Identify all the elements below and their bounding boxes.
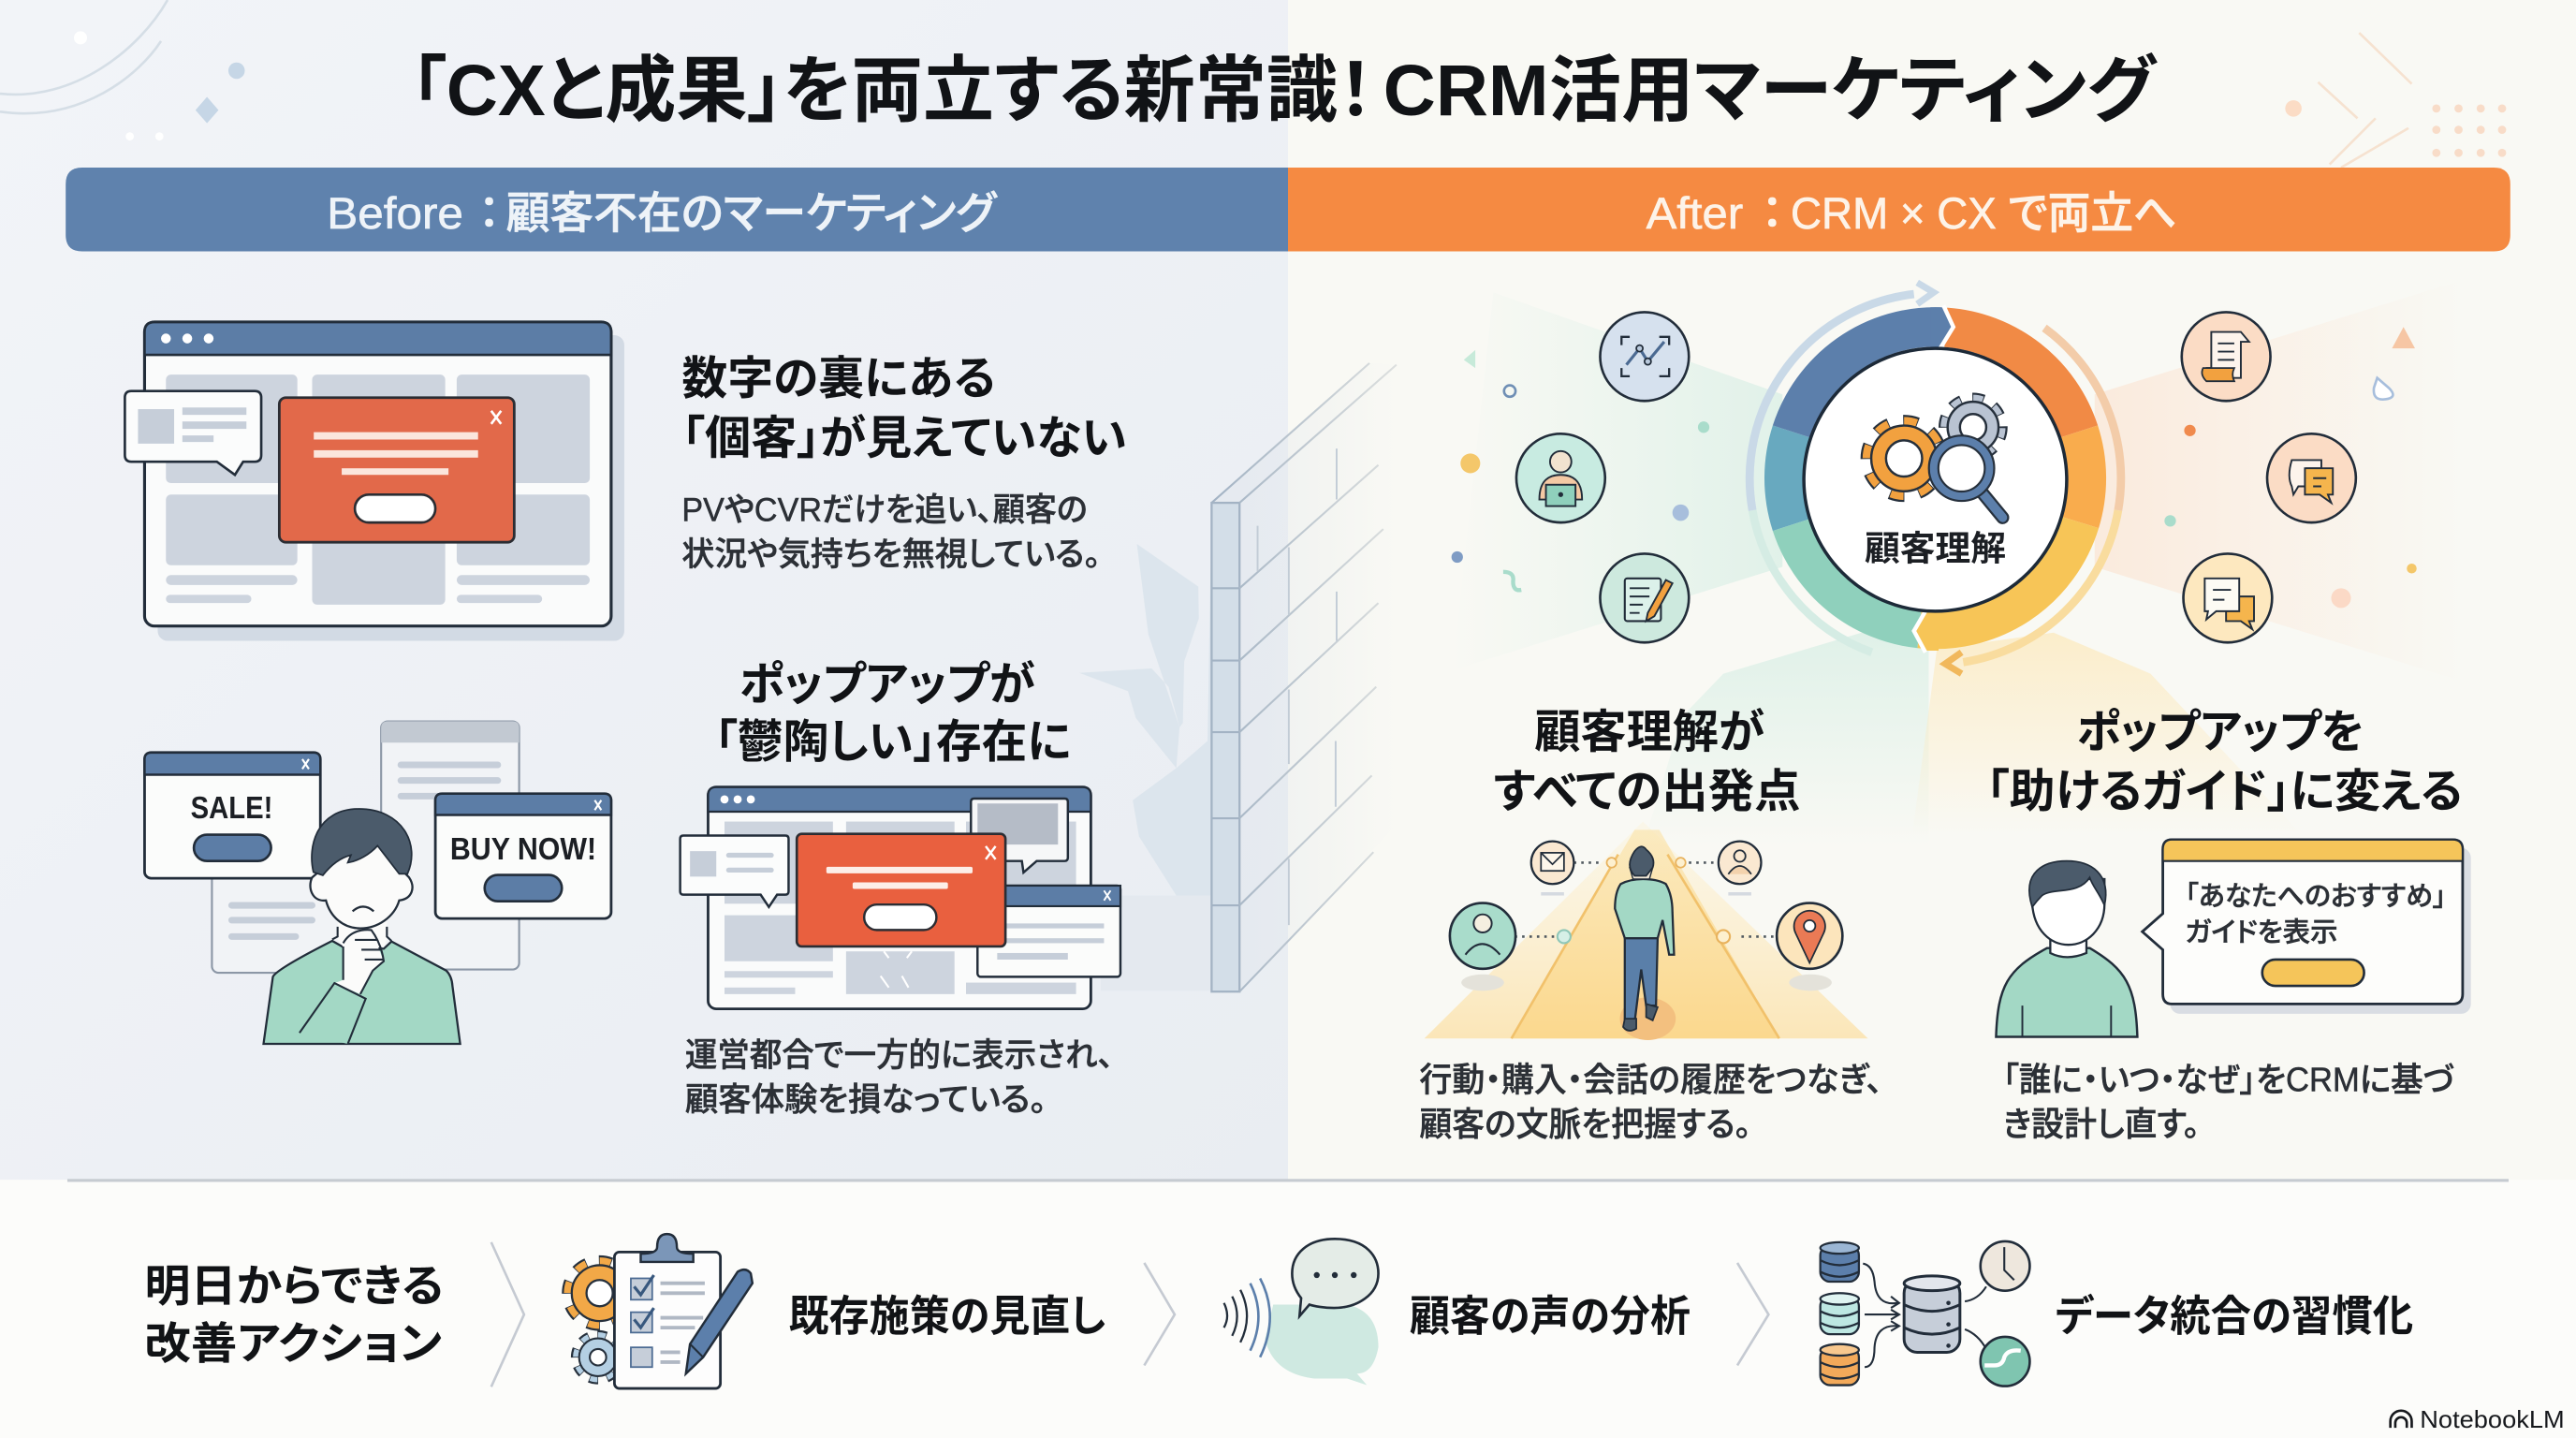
- icon: person with laptop: [1516, 433, 1605, 522]
- arrow: chevron 2: [1144, 1263, 1175, 1365]
- action label: review existing measures: 既存施策の見直し: [788, 1293, 1105, 1341]
- icon: clock: [1981, 1241, 2029, 1291]
- heading: actions from tomorrow: [144, 1262, 444, 1369]
- body text: connect history: 顧客の文脈を把握する。: [1419, 1105, 1751, 1143]
- icon: chat bubbles yellow: [2184, 553, 2272, 642]
- circular customer understanding diagram: [1749, 283, 2121, 674]
- database: central: [1904, 1276, 1960, 1352]
- body text: one-sided display: 顧客体験を損なっている。: [685, 1081, 1046, 1118]
- heading: actions from tomorrow: 改善アクション: [144, 1319, 442, 1369]
- guide popup: [2143, 840, 2471, 1014]
- popup: SALE: SALE!: [191, 791, 272, 826]
- icon: scroll document: [2182, 312, 2271, 401]
- divider: [67, 1179, 2509, 1181]
- heading: customer understanding is the starting point: [1493, 708, 1801, 817]
- database: orange: [1821, 1344, 1859, 1386]
- body text: redesign with CRM: き設計し直す。: [2002, 1105, 2200, 1143]
- icon: mail: [1531, 842, 1573, 884]
- center circle: [1804, 348, 2067, 611]
- center label: 顧客理解: [1865, 529, 2006, 567]
- action label: make data integration a habit: データ統合の習慣化: [2056, 1293, 2413, 1341]
- action label: analyze customer voice: 顧客の声の分析: [1410, 1293, 1690, 1341]
- heading: turn popups into helpful guides: ポップアップを: [2076, 708, 2364, 758]
- body text: PV and CVR: 状況や気持ちを無視している。: [681, 536, 1101, 573]
- popup: BUY NOW: BUY NOW!: [450, 832, 596, 867]
- heading: individual customers not visible: 「個客」が見えていない: [681, 413, 1127, 463]
- outer arc arrows: [1749, 283, 2121, 674]
- icon: sync circle: [1981, 1337, 2029, 1387]
- icon: clipboard with gears and pen: [568, 1234, 753, 1388]
- header bar: before: ：: [478, 189, 500, 239]
- walking person: [1615, 846, 1674, 1031]
- header bar: before: Before: [327, 189, 463, 239]
- heading: actions from tomorrow: 明日からできる: [144, 1262, 444, 1312]
- title: CRM活用マーケティング: [1383, 51, 2158, 131]
- header bar: after: After: [1647, 189, 1743, 239]
- decoration: top right lines and dots: [2285, 33, 2506, 168]
- icon: location pin: [1777, 903, 1842, 969]
- database: blue: [1821, 1242, 1859, 1282]
- decoration: confetti dots: [1452, 327, 2417, 608]
- heading: individual customers not visible: 数字の裏にある: [681, 354, 996, 404]
- icon: database integration: [1821, 1241, 2029, 1387]
- heading: popups are annoying: [714, 660, 1071, 768]
- person: [1996, 861, 2137, 1036]
- arrow: chevron 1: [491, 1242, 524, 1387]
- window: lower right: [977, 886, 1120, 976]
- header bar: after: ：: [1761, 189, 1783, 239]
- background: action strip: [0, 1180, 2576, 1438]
- icon: user large: [1450, 903, 1515, 969]
- body text: PV and CVR: [681, 492, 1101, 573]
- body text: one-sided display: [685, 1037, 1114, 1118]
- body text: PV and CVR: PVやCVRだけを追い、顧客の: [681, 492, 1088, 528]
- ring segments: [1784, 327, 2086, 629]
- icon: voice bubbles: [1224, 1239, 1379, 1386]
- popup: BUY NOW: [435, 794, 611, 918]
- speech bubble: [124, 391, 261, 475]
- title: [411, 51, 2158, 131]
- thinking person: [264, 809, 461, 1044]
- connectors: [1515, 862, 1775, 936]
- body text: redesign with CRM: 「誰に・いつ・なぜ」をCRMに基づ: [2002, 1060, 2454, 1098]
- header bar: after: CRM × CX で両立へ: [1791, 189, 2177, 239]
- back windows: [212, 721, 520, 973]
- body text: connect history: [1419, 1060, 1882, 1143]
- decoration: top left arcs and dots: [0, 0, 245, 140]
- illustration: person with guide popup: [1996, 840, 2471, 1036]
- light beams: [1453, 279, 2465, 846]
- wall illustration: [1079, 363, 1397, 991]
- background: after panel: [1288, 0, 2576, 1183]
- database: teal: [1821, 1293, 1859, 1334]
- illustration: customer journey road: [1425, 822, 1868, 1040]
- illustration: cluttered browser with popups: [681, 787, 1120, 1009]
- guide popup: ガイドを表示: [2185, 918, 2338, 948]
- heading: customer understanding is the starting point: 顧客理解が: [1534, 708, 1764, 758]
- heading: popups are annoying: ポップアップが: [739, 660, 1035, 711]
- popup: red: [797, 834, 1005, 946]
- icon: gears and magnifier: [1868, 399, 2002, 518]
- background: before panel: [0, 0, 1288, 1183]
- guide popup: 「あなたへのおすすめ」: [2185, 882, 2446, 912]
- icon: chart: [1600, 312, 1689, 401]
- header bar: before: 顧客不在のマーケティング: [506, 189, 998, 239]
- body text: one-sided display: 運営都合で一方的に表示され、: [685, 1037, 1114, 1074]
- icon: chat bubbles orange: [2267, 433, 2356, 522]
- popup: orange: [279, 398, 514, 542]
- header bar: after: [1288, 168, 2510, 252]
- popup: SALE: [144, 753, 320, 878]
- arrow: chevron 3: [1737, 1263, 1768, 1365]
- icon: document with pencil: [1600, 553, 1689, 642]
- watermark: NotebookLM: NotebookLM: [2420, 1407, 2565, 1433]
- heading: customer understanding is the starting point: すべての出発点: [1493, 767, 1801, 817]
- heading: turn popups into helpful guides: [1986, 708, 2463, 817]
- icon: user small: [1719, 842, 1761, 884]
- body text: redesign with CRM: [2002, 1060, 2454, 1143]
- title: 「CXと成果」を両立する新常識！: [411, 51, 1373, 131]
- heading: individual customers not visible: [681, 354, 1127, 463]
- header bar: before: [66, 168, 1288, 252]
- bubble: top right: [971, 799, 1068, 873]
- bubble: left: [681, 835, 788, 907]
- illustration: browser window with popup: [124, 322, 624, 640]
- heading: popups are annoying: 「鬱陶しい」存在に: [714, 717, 1071, 768]
- illustration: person surrounded by popups: [144, 721, 611, 1044]
- heading: turn popups into helpful guides: 「助けるガイド」に変える: [1986, 767, 2463, 817]
- body text: connect history: 行動・購入・会話の履歴をつなぎ、: [1419, 1060, 1882, 1098]
